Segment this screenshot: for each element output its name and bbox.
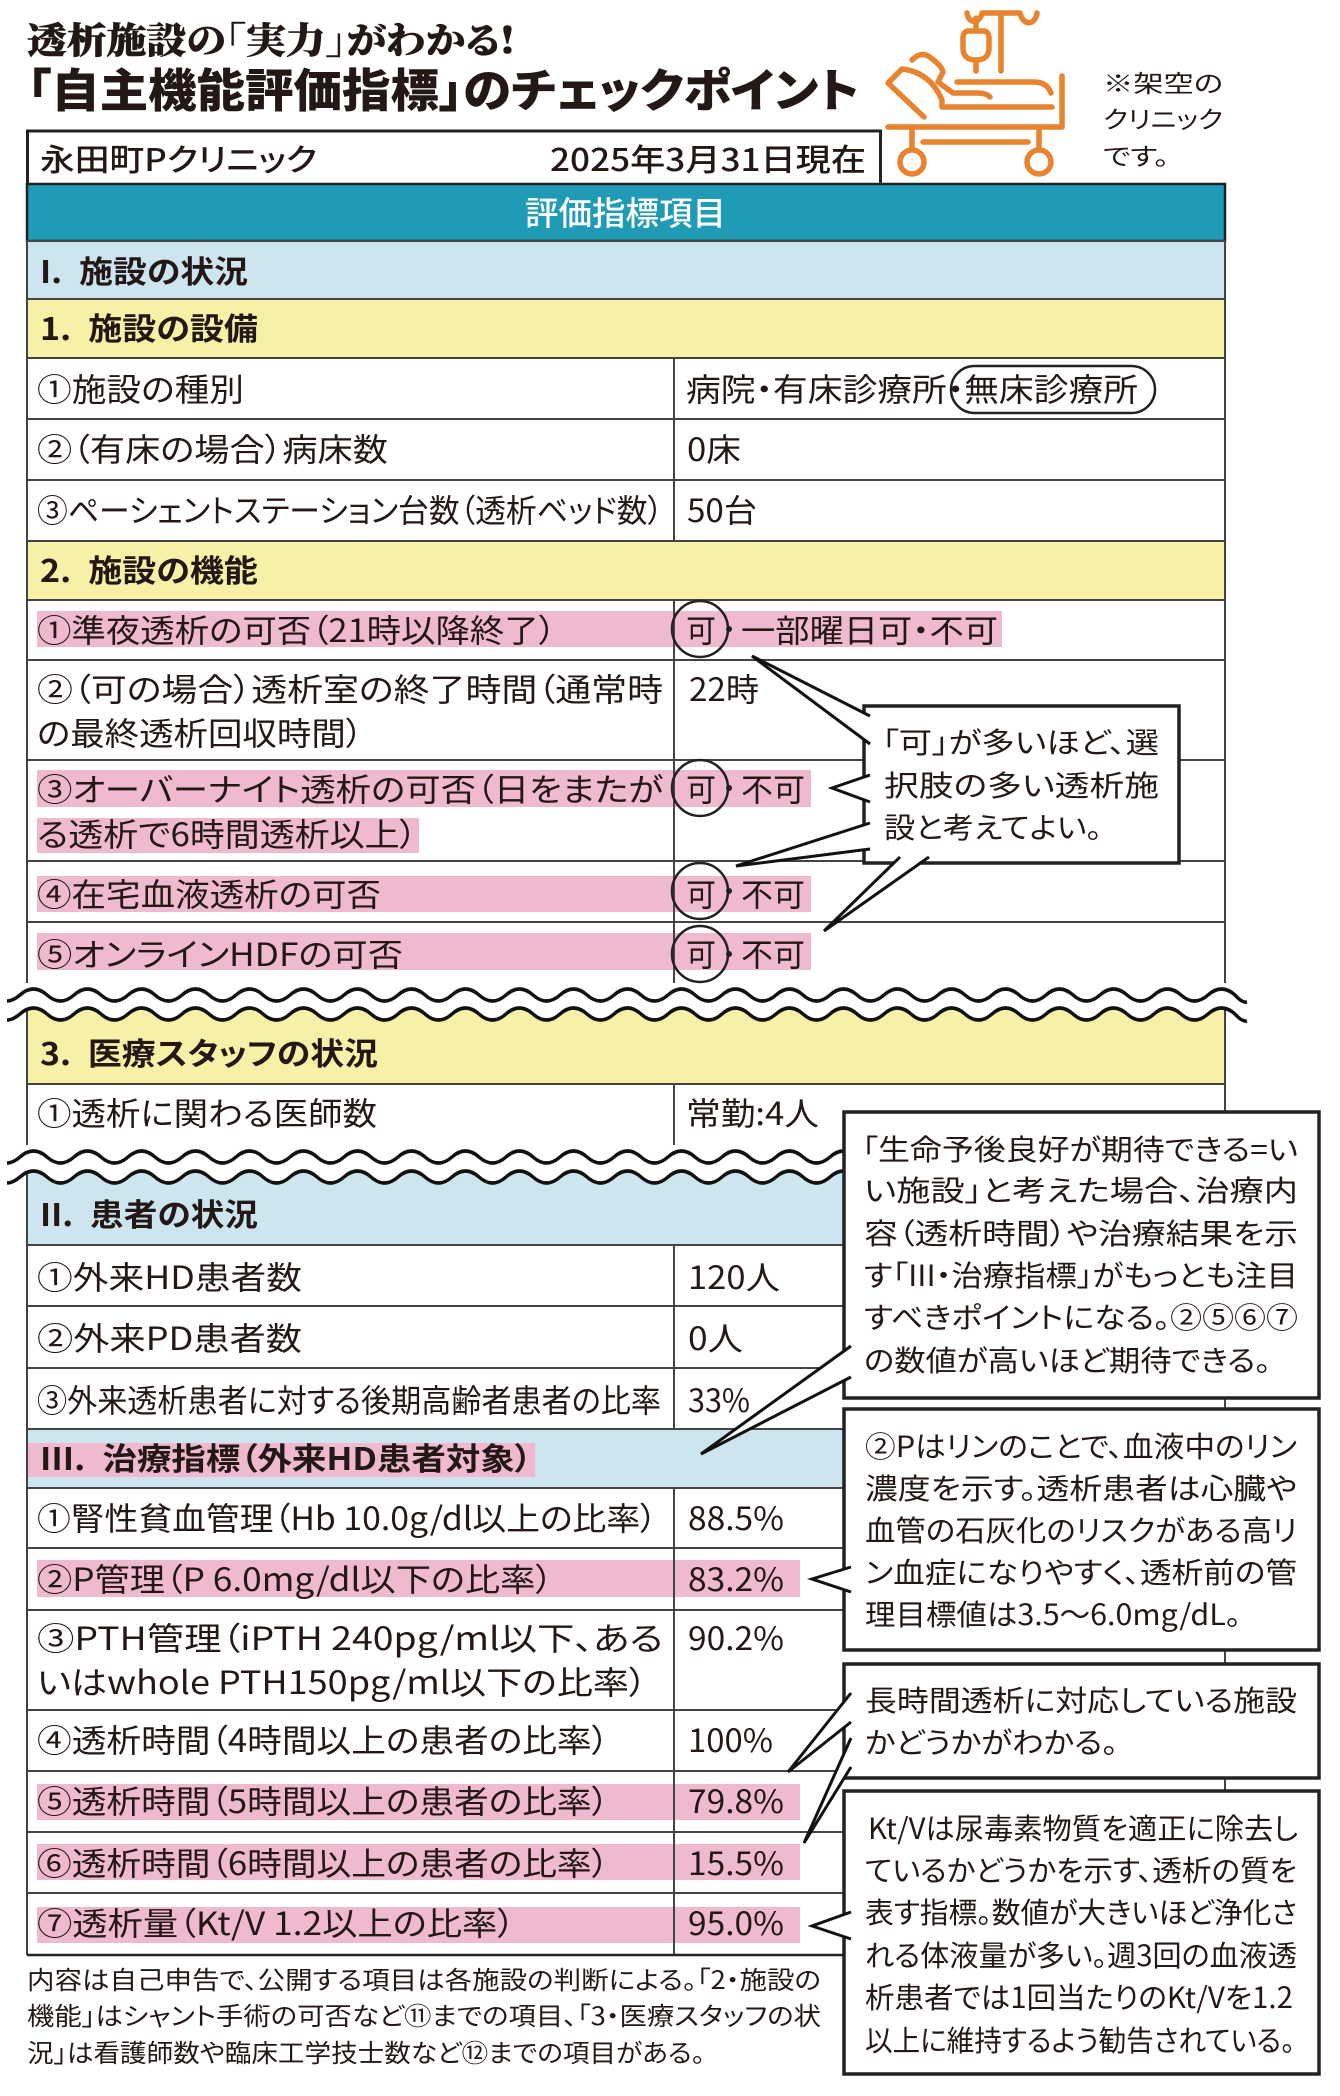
table: treatment indicators [27, 1429, 1225, 1955]
callout line 1: 「生命予後良好が期待できる=い [862, 1127, 1298, 1169]
callout line 4: ン血症になりやすく、透析前の管 [865, 1550, 1297, 1592]
section 2 heading: 2. 施設の機能 [40, 546, 258, 591]
patient row 3 value: 33% [688, 1376, 750, 1422]
indicator 7 label: ⑦透析量（Kt/V 1.2以上の比率） [37, 1899, 515, 1945]
row 1 value: 病院・有床診療所・無床診療所 [686, 365, 1138, 411]
callout line 2: かどうかがわかる。 [865, 1720, 1118, 1762]
title line 2: 「自主機能評価指標」のチェックポイント [27, 55, 859, 121]
section 1 band [27, 299, 1225, 358]
row 4 yes: 可 [686, 870, 716, 916]
row 2 label: ②（有床の場合）病床数 [37, 425, 388, 471]
section I band [27, 241, 1225, 299]
callout: phosphorus [812, 1409, 1319, 1650]
row 3 yes: 可 [686, 765, 716, 811]
row 1 label: ①施設の種別 [37, 365, 244, 411]
callout: more yes answers [736, 656, 1179, 931]
callout line 2: ているかどうかを示す、透析の質を [865, 1848, 1297, 1890]
selection pill [951, 366, 1155, 413]
section 3 heading: 3. 医療スタッフの状況 [40, 1029, 378, 1074]
section II heading: II. 患者の状況 [40, 1190, 258, 1235]
row 3 label: ③オーバーナイト透析の可否（日をまたが [37, 765, 664, 811]
callout line 5: すべきポイントになる。②⑤⑥⑦ [864, 1295, 1298, 1337]
row 3 label: ③ペーシェントステーション台数（透析ベッド数） [37, 486, 663, 532]
section 2 band [27, 541, 1225, 600]
footnote line 3: 況」は看護師数や臨床工学技士数など⑫までの項目がある。 [27, 2034, 705, 2070]
table: upper section [27, 184, 1225, 983]
callout line 3: 血管の石灰化のリスクがある高リ [865, 1508, 1297, 1550]
callout line 3: 設と考えてよい。 [884, 805, 1102, 847]
row 2 value: 0床 [687, 425, 741, 471]
indicator 4 label: ④透析時間（4時間以上の患者の比率） [37, 1716, 609, 1762]
footnote line 2: 機能」はシャント手術の可否など⑪までの項目、「3・医療スタッフの状 [27, 1997, 821, 2033]
rows: facility equipment [27, 358, 1225, 541]
indicator 2 value: 83.2% [688, 1555, 784, 1601]
section III highlight [28, 1443, 535, 1477]
footnote [27, 1961, 821, 2070]
header band [27, 184, 1225, 241]
staff row value: 常勤:4人 [686, 1089, 819, 1135]
callout tail [701, 1346, 851, 1454]
footnote line 1: 内容は自己申告で、公開する項目は各施設の判断による。「2・施設の [27, 1961, 821, 1997]
row 4 circle [672, 863, 732, 919]
title line 1: 透析施設の「実力」がわかる! [27, 13, 515, 64]
callout line 2: い施設」と考えた場合、治療内 [864, 1168, 1298, 1210]
row 5 no: 不可 [741, 930, 805, 976]
row 1 options: 一部曜日可・不可 [741, 606, 998, 652]
callout line 4: れる体液量が多い。週3回の血液透 [865, 1933, 1297, 1975]
clinic name: 永田町Pクリニック [40, 135, 317, 180]
row 3 value: 50台 [687, 486, 757, 532]
row 5 circle [672, 926, 732, 982]
callout: Kt/V [812, 1791, 1319, 2074]
callout line 1: ②Pはリンのことで、血液中のリン [865, 1424, 1297, 1466]
row 2 label: ②（可の場合）透析室の終了時間（通常時 [37, 665, 663, 711]
callout line 2: 濃度を示す。透析患者は心臓や [865, 1466, 1297, 1508]
date: 2025年3月31日現在 [550, 135, 866, 180]
row 3 circle [672, 760, 732, 816]
section 1 heading: 1. 施設の設備 [40, 304, 258, 349]
row 2 value: 22時 [689, 665, 759, 711]
indicator 3 value: 90.2% [688, 1614, 784, 1660]
callout line 6: の数値が高いほど期待できる。 [864, 1338, 1271, 1380]
callout: prognosis [701, 1112, 1319, 1454]
row 1 yes: 可 [686, 606, 716, 652]
indicator 4 value: 100% [688, 1716, 773, 1762]
section 3 band [27, 1006, 1225, 1084]
callout line 1: 「可」が多いほど、選 [882, 720, 1159, 762]
row 4 no: 不可 [741, 870, 805, 916]
indicator 5 label: ⑤透析時間（5時間以上の患者の比率） [37, 1777, 609, 1823]
wave break 2 [0, 1146, 1340, 1184]
note line 1: ※架空の [1103, 64, 1223, 99]
indicator 7 value: 95.0% [688, 1899, 784, 1945]
callout line 3: 容（透析時間）や治療結果を示 [864, 1211, 1298, 1253]
indicator 6 label: ⑥透析時間（6時間以上の患者の比率） [37, 1839, 609, 1885]
highlight bands [37, 1560, 800, 1943]
patient row 3 label: ③外来透析患者に対する後期高齢者患者の比率 [37, 1376, 661, 1422]
indicator 1 label: ①腎性貧血管理（Hb 10.0g/dl以上の比率） [37, 1494, 657, 1540]
row 2 label cont: の最終透析回収時間） [37, 709, 363, 755]
callout line 5: 理目標値は3.5〜6.0mg/dL。 [865, 1592, 1241, 1634]
callout tail [812, 1567, 851, 1592]
clinic name box [28, 131, 880, 185]
row 3 label cont: る透析で6時間透析以上） [37, 810, 417, 856]
rows: facility functions [27, 600, 1225, 983]
section I heading: I. 施設の状況 [40, 247, 248, 292]
indicator 2 label: ②P管理（P 6.0mg/dl以下の比率） [37, 1555, 553, 1601]
callout tail [812, 1912, 851, 1939]
note line 3: です。 [1103, 137, 1169, 172]
indicator 6 value: 15.5% [688, 1839, 784, 1885]
row 1 label: ①準夜透析の可否（21時以降終了） [37, 606, 556, 652]
callout line 4: す「III・治療指標」がもっとも注目 [864, 1253, 1298, 1295]
row 5 label: ⑤オンラインHDFの可否 [37, 930, 403, 976]
callout line 3: 表す指標。数値が大きいほど浄化さ [865, 1890, 1297, 1932]
indicator 1 value: 88.5% [688, 1494, 784, 1540]
section III band [27, 1429, 1225, 1488]
callout line 2: 択肢の多い透析施 [884, 763, 1159, 805]
patient row 1 value: 120人 [688, 1253, 780, 1299]
callout line 1: Kt/Vは尿毒素物質を適正に除去し [868, 1806, 1298, 1848]
icon: hospital bed with IV drip [888, 13, 1062, 174]
note: fictional clinic [1103, 64, 1223, 172]
section III heading: III. 治療指標（外来HD患者対象） [40, 1434, 532, 1479]
callout line 1: 長時間透析に対応している施設 [865, 1678, 1297, 1720]
wave break 1 [0, 984, 1340, 1021]
header text: 評価指標項目 [525, 187, 726, 235]
patient row 1 label: ①外来HD患者数 [37, 1253, 302, 1299]
row 5 yes: 可 [686, 930, 716, 976]
row 4 label: ④在宅血液透析の可否 [37, 870, 381, 916]
callout tails [736, 656, 929, 931]
indicator 5 value: 79.8% [688, 1777, 784, 1823]
table: staff section [27, 1006, 1225, 1145]
indicator 3 label: ③PTH管理（iPTH 240pg/ml以下、ある [37, 1614, 663, 1660]
callout: long dialysis [788, 1664, 1319, 1843]
callout line 6: 以上に維持するよう勧告されている。 [865, 2018, 1295, 2060]
callout line 5: 析患者では1回当たりのKt/Vを1.2 [865, 1975, 1293, 2017]
highlight bands [37, 611, 1002, 970]
row 3 no: 不可 [741, 765, 805, 811]
title [27, 13, 859, 121]
table: patient section [27, 1169, 1225, 1429]
staff row label: ①透析に関わる医師数 [37, 1089, 377, 1135]
row 1 circle [672, 601, 732, 657]
section II band [27, 1169, 1225, 1245]
note line 2: クリニック [1103, 100, 1223, 135]
callout tails [788, 1693, 851, 1843]
patient row 2 value: 0人 [688, 1314, 743, 1360]
indicator 3 label cont: いはwhole PTH150pg/ml以下の比率） [37, 1658, 647, 1704]
patient row 2 label: ②外来PD患者数 [37, 1314, 302, 1360]
